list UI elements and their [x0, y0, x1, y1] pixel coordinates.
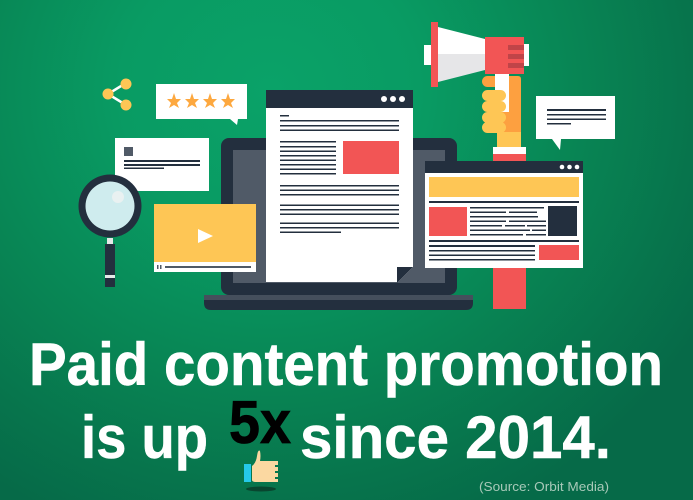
- source note: (Source: Orbit Media): [479, 479, 609, 494]
- text card: [115, 138, 209, 191]
- megaphone and hand: [424, 22, 529, 309]
- website window: [425, 161, 583, 268]
- icon: thumbs up: [244, 451, 278, 492]
- document window: [266, 90, 413, 283]
- title line 2: since 2014: since 2014.: [300, 404, 611, 471]
- title line 2: is up: is up: [81, 404, 208, 471]
- icon: share: [102, 78, 132, 110]
- title line 1: Paid content promotion: [29, 331, 663, 398]
- rating speech bubble: [156, 84, 247, 125]
- title: 5x: 5x: [229, 389, 291, 456]
- laptop: [204, 138, 473, 310]
- video player: [154, 204, 256, 272]
- speech bubble: [536, 96, 615, 150]
- magnifying glass: [78, 174, 142, 287]
